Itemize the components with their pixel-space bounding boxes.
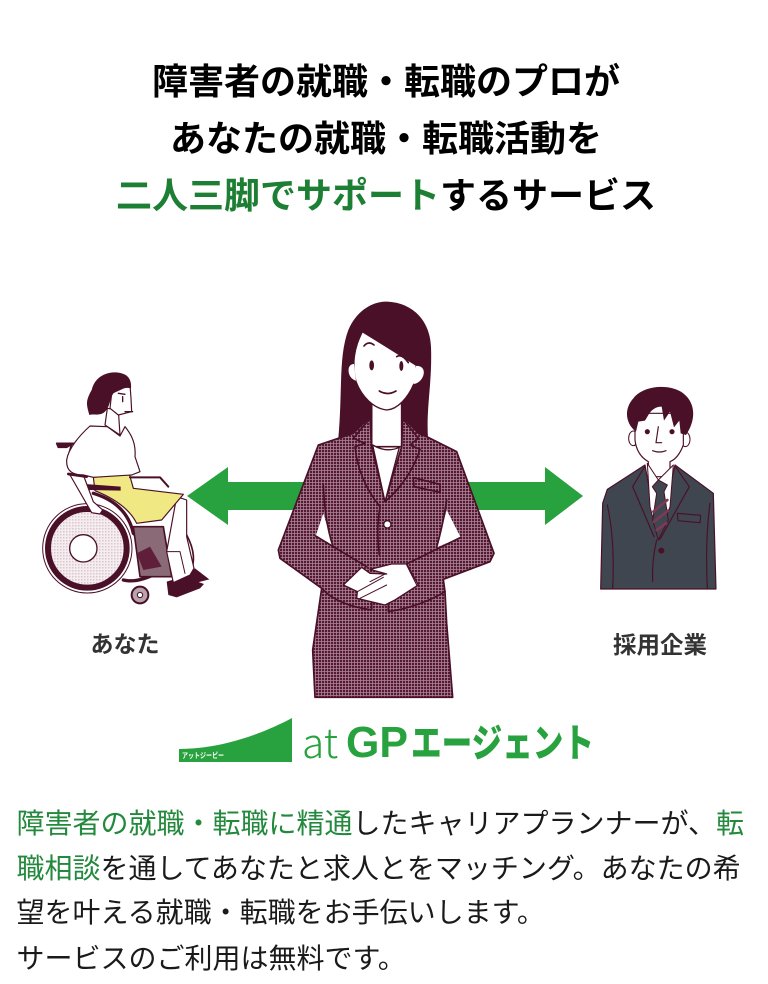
- chair frame: [93, 493, 163, 581]
- caster wheel: [132, 587, 148, 603]
- face: [354, 332, 417, 410]
- shirt: [647, 463, 673, 540]
- ears: [629, 431, 638, 446]
- left arrow: [187, 467, 310, 525]
- near shoe: [167, 577, 204, 597]
- logo small text: アットジーピー: [182, 751, 224, 760]
- face and neck: [635, 413, 683, 477]
- blouse: [67, 426, 140, 477]
- label: employer: 採用企業: [613, 632, 707, 658]
- title line 3: 二人三脚でサポートするサービス: [116, 175, 656, 216]
- description line 2: 職相談を通してあなたと求人とをマッチング。あなたの希: [16, 853, 741, 884]
- right arrow: [465, 467, 583, 525]
- logo katakana: エージェント: [411, 713, 594, 769]
- logo: atGP Agent: [179, 710, 594, 770]
- neck: [372, 403, 402, 447]
- title: [116, 61, 656, 216]
- rear wheel: [48, 509, 127, 588]
- blouse: [373, 445, 399, 502]
- logo GP: GP: [346, 718, 408, 767]
- logo at: at: [302, 710, 338, 770]
- title line 1: 障害者の就職・転職のプロが: [152, 61, 620, 102]
- label: you: あなた: [90, 631, 160, 657]
- jacket: [278, 417, 494, 697]
- far shoe: [185, 568, 209, 583]
- logo mark: [179, 718, 292, 762]
- hair: [87, 372, 131, 415]
- facial features: [364, 343, 408, 393]
- left ear: [349, 364, 356, 381]
- person: career planner: [278, 302, 494, 697]
- description text: [16, 808, 744, 974]
- lapels and pocket: [607, 466, 710, 588]
- description line 1: 障害者の就職・転職に精通したキャリアプランナーが、転: [16, 808, 744, 839]
- description line 3: 望を叶える就職・転職をお手伝いします。: [16, 897, 545, 928]
- hair: [627, 387, 693, 435]
- tie: [652, 480, 668, 540]
- arm gaps: [316, 513, 333, 547]
- hair: [338, 302, 431, 438]
- neck: [105, 408, 120, 435]
- right ear: [414, 366, 424, 384]
- face details: [645, 427, 674, 452]
- description line 4: サービスのご利用は無料です。: [16, 943, 406, 974]
- person: wheelchair user: [43, 372, 209, 603]
- suit: [601, 465, 716, 589]
- arm: [70, 475, 103, 514]
- button: [658, 548, 664, 554]
- person: employer: [601, 387, 716, 589]
- armrest: [85, 484, 121, 491]
- face: [110, 385, 132, 415]
- title line 2: あなたの就職・転職活動を: [170, 118, 602, 159]
- legs: [167, 497, 194, 583]
- skirt: [93, 474, 183, 523]
- hands: [343, 564, 418, 605]
- jacket seams: [316, 418, 461, 612]
- button: [384, 521, 391, 528]
